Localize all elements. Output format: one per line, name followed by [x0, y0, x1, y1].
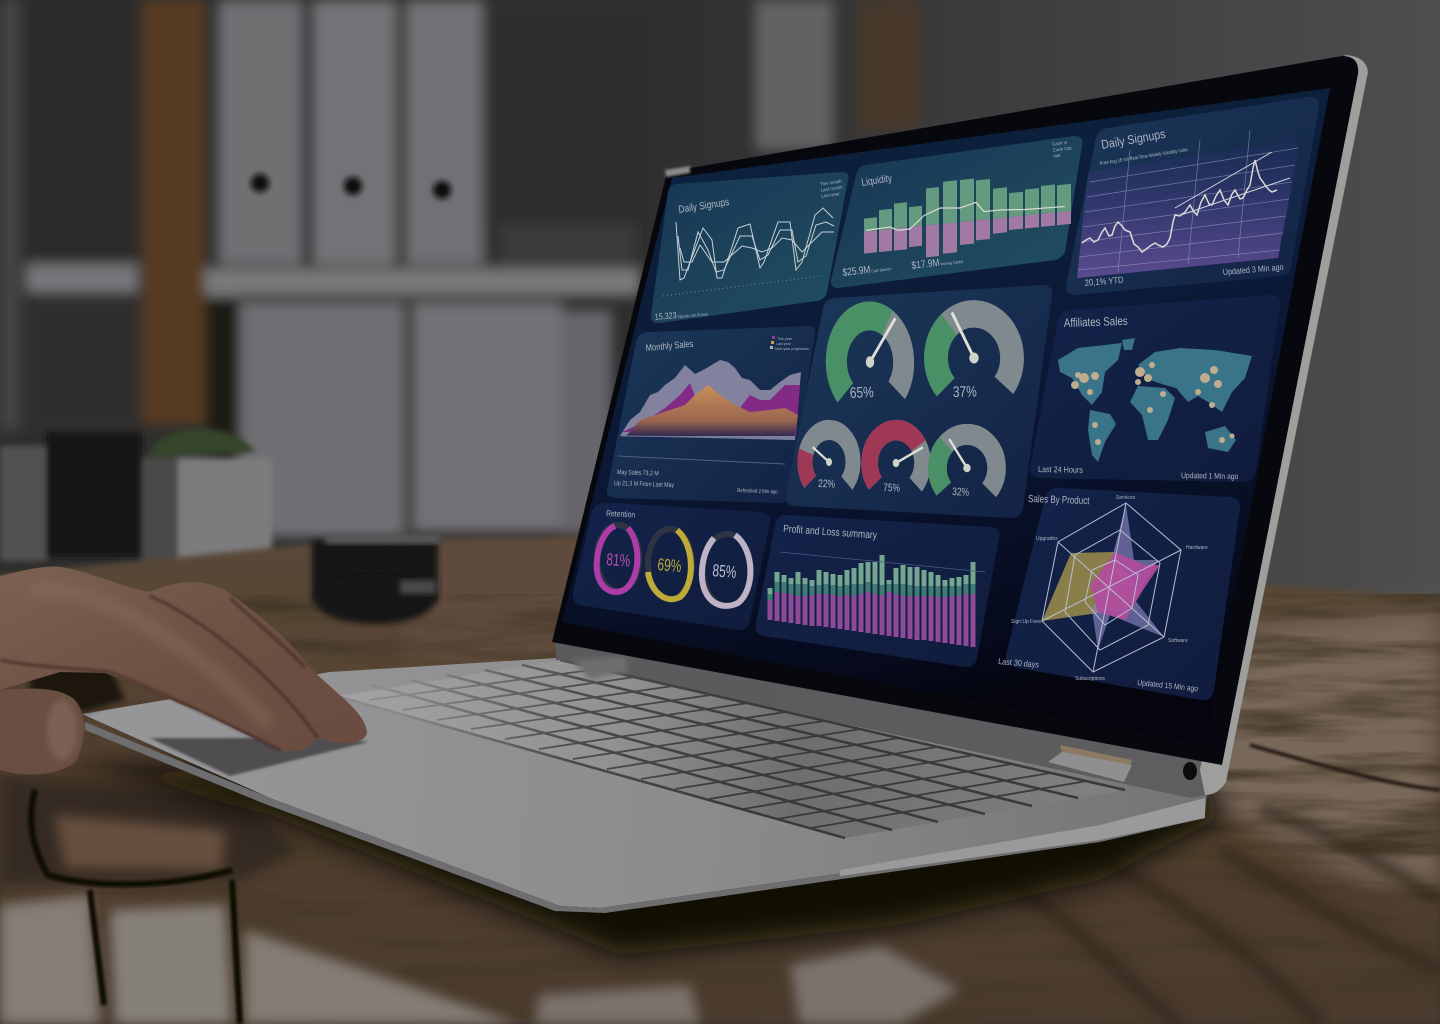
- gauge 22 percent: [804, 429, 854, 483]
- legend: Cash In: [1052, 140, 1068, 147]
- front edge: [85, 722, 1205, 913]
- gauge 75 percent: [869, 429, 923, 485]
- radar chart: Subscriptions: [1075, 676, 1106, 682]
- legend: Next year projections: [775, 347, 809, 351]
- fingers and back of hand: [0, 567, 367, 751]
- laptop base: [82, 642, 1224, 913]
- radar chart: Software: [1168, 638, 1188, 644]
- donut 81 percent: [597, 525, 639, 592]
- legend: Cash Out: [1052, 145, 1073, 153]
- panel: monthly sales: Refreshed 2 Min ago: [737, 488, 778, 496]
- panel: daily signups right: [1066, 97, 1319, 295]
- donut 81 percent: 81%: [606, 551, 631, 571]
- donut 69 percent: [648, 529, 692, 599]
- panel: liquidity: [831, 136, 1082, 288]
- left hinge: [572, 656, 628, 680]
- trackpad shadow: [150, 738, 368, 776]
- keyboard: [340, 660, 1125, 838]
- legend: Last year: [776, 342, 792, 346]
- legend: [1052, 139, 1073, 159]
- label: 32%: [952, 486, 970, 499]
- axis: [663, 276, 822, 296]
- legend: Net: [1053, 153, 1061, 159]
- shadow between palm and thumb: [30, 665, 125, 712]
- radar chart: Sign Up Fees: [1011, 619, 1042, 625]
- background wall and shelves: [0, 0, 1440, 640]
- panel: gauges: [786, 285, 1052, 518]
- heading: Monthly Sales: [645, 338, 694, 353]
- light wood lower left: [0, 895, 100, 1024]
- line chart: [676, 208, 834, 280]
- donut 85 percent: 85%: [712, 562, 737, 583]
- donut 69 percent: 69%: [657, 556, 682, 577]
- laptop shadow: [60, 760, 1225, 955]
- wood cracks: [31, 790, 240, 1024]
- finger shading: [0, 596, 318, 750]
- dark objects and plant pot on the table: [0, 428, 272, 576]
- light wood right: [1200, 605, 1440, 900]
- panel: monthly sales: [607, 326, 815, 503]
- panel: sales by product: [998, 488, 1240, 700]
- menu: Price Aug 18 Vol Real-Time Weekly Volatility Index: [1099, 147, 1189, 166]
- laptop lid: [552, 55, 1368, 795]
- thumb: [0, 689, 84, 774]
- axis: [618, 456, 785, 464]
- time range: Last 30 days: [998, 656, 1039, 670]
- radar chart: [1011, 495, 1208, 682]
- ytd: 20,1% YTD: [1084, 274, 1124, 288]
- radar chart: Upgrades: [1036, 536, 1058, 542]
- binder holes: [251, 174, 451, 199]
- area chart: [620, 360, 801, 440]
- heading: Retention: [606, 508, 635, 520]
- heading: Daily Signups: [1100, 127, 1167, 152]
- stacked bars: [864, 169, 1071, 264]
- hand on trackpad: [0, 567, 367, 774]
- knuckle highlight: [30, 589, 270, 725]
- updated: Updated 1 Min ago: [1181, 470, 1238, 481]
- grain: [47, 594, 1440, 906]
- updated: Updated 3 Min ago: [1222, 262, 1284, 277]
- legend: This year: [777, 337, 793, 341]
- world map: [1058, 338, 1252, 462]
- panel: profit and loss summary: [756, 515, 999, 667]
- heading: Daily Signups: [678, 196, 730, 216]
- heading: Profit and Loss summary: [783, 523, 878, 542]
- deck: [82, 658, 1207, 908]
- dark under-hand wood: [0, 775, 300, 885]
- panel: monthly sales: Up 21,3 M From Last May: [614, 481, 674, 489]
- label: 22%: [818, 478, 836, 491]
- legend: [819, 179, 844, 199]
- camera dot: [1183, 762, 1197, 780]
- thumb nail: [47, 700, 77, 760]
- heading: Liquidity: [861, 172, 893, 189]
- legend: This month: [819, 179, 843, 187]
- notes: May Sales 73,2 M: [617, 470, 659, 478]
- heading: Sales By Product: [1028, 493, 1090, 506]
- silver frame: [1200, 55, 1368, 795]
- time range: Last 24 Hours: [1038, 464, 1083, 475]
- stacked bar chart: [770, 555, 973, 647]
- table surface: [0, 534, 1440, 1024]
- total: 15,323 Signups Last 30 days: [654, 308, 709, 322]
- panel: liquidity: $17.9M Working Capital: [911, 254, 964, 272]
- updated: Updated 15 Min ago: [1137, 677, 1199, 694]
- right hinge: [1048, 745, 1132, 782]
- screen background: [562, 88, 1330, 745]
- values: $25.9M Cash Balance: [842, 261, 892, 279]
- black bezel: [552, 56, 1358, 765]
- panel: retention: [573, 503, 770, 630]
- label: 37%: [953, 383, 977, 400]
- gauge 32 percent: [937, 434, 997, 490]
- donut 85 percent: [702, 534, 751, 606]
- legend: Last month: [820, 185, 843, 193]
- label: 65%: [850, 384, 874, 401]
- panel: daily signups left: [651, 172, 848, 323]
- stock chart: [1077, 130, 1300, 278]
- radar chart: Services: [1116, 495, 1136, 501]
- top-left lid highlight: [665, 166, 690, 177]
- gauge 37 percent: [935, 311, 1013, 387]
- gridlines: [780, 552, 985, 572]
- gauge 65 percent: [835, 314, 905, 393]
- hinge band: [556, 642, 1224, 798]
- panel: affiliates sales: [1030, 295, 1280, 482]
- radar chart: Hardware: [1186, 545, 1208, 551]
- legend: Last year: [821, 191, 841, 199]
- legend: [770, 336, 809, 351]
- lens-shaped object on table: [312, 534, 440, 624]
- brown lower right streaks: [1000, 810, 1440, 1024]
- label: 75%: [883, 482, 901, 495]
- heading: Affiliates Sales: [1064, 315, 1128, 330]
